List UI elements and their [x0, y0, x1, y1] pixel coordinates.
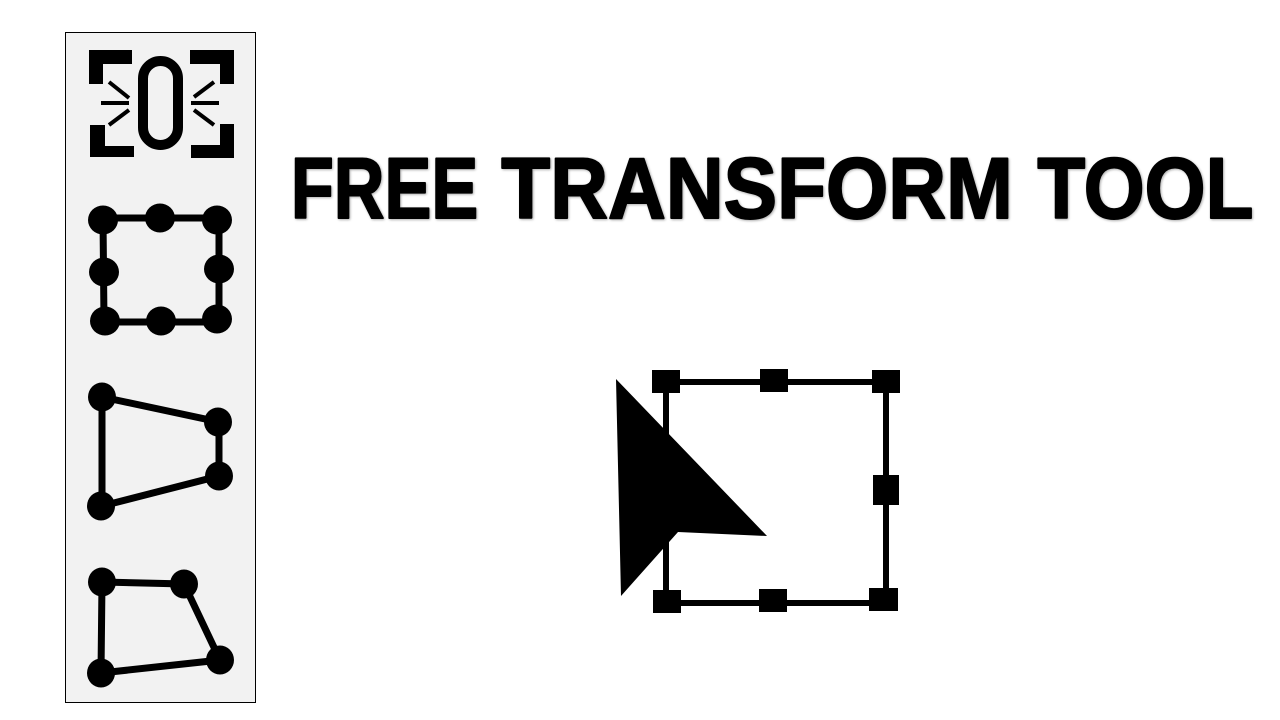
- panel: tool sidebar: [66, 32, 256, 702]
- title: FREE: [291, 141, 478, 237]
- title: TRANSFORM: [501, 141, 1013, 237]
- icon: transform box with cursor: [616, 369, 900, 613]
- title: [291, 141, 1253, 237]
- icon: free distort shape: [87, 568, 234, 688]
- transform bounding box: [652, 369, 900, 613]
- icon: square with eight handles: [88, 204, 234, 336]
- title: TOOL: [1037, 141, 1253, 237]
- icon: center-scale tool: [89, 50, 234, 158]
- icon: perspective distort shape: [87, 382, 233, 520]
- icon: arrow cursor: [616, 379, 767, 596]
